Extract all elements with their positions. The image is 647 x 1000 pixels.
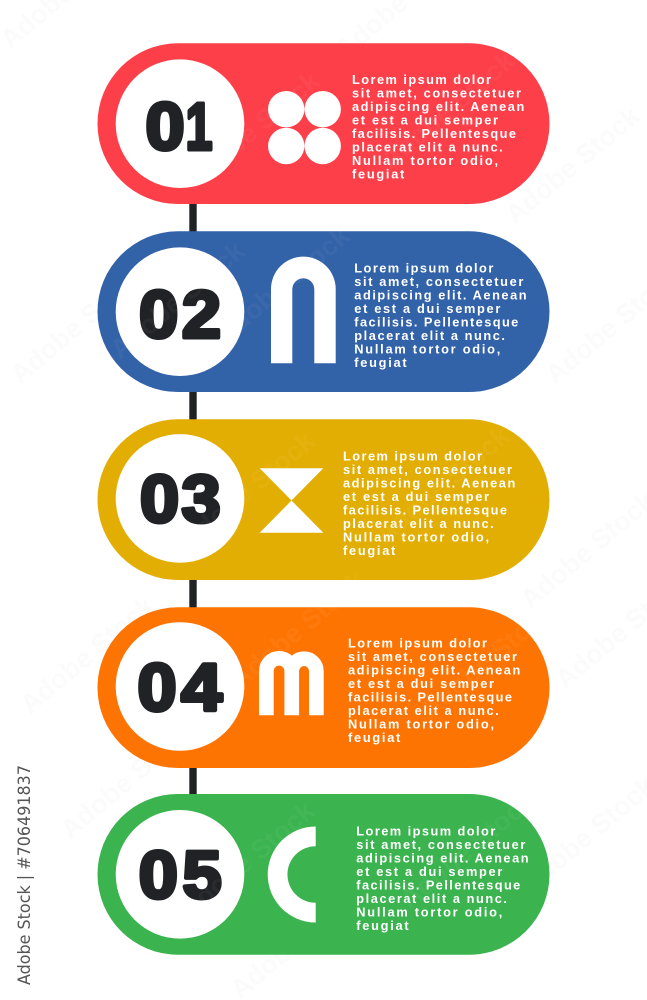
- number badge 02: [116, 247, 244, 376]
- text block 01: et est a dui semper: [352, 112, 498, 128]
- text block 05: [356, 823, 529, 933]
- number badge 05: 0: [139, 838, 178, 913]
- text block 04: sit amet, consectetuer: [348, 649, 517, 664]
- number badge 04: [116, 622, 244, 751]
- watermark over panels: Adobe Stock: [370, 420, 516, 550]
- panel: step 04: [98, 607, 550, 768]
- text block 05: sit amet, consectetuer: [356, 837, 525, 852]
- text block 03: Lorem ipsum dolor: [343, 449, 482, 464]
- icon: four circles: [268, 91, 341, 164]
- icon: half ring: [268, 826, 316, 922]
- text block 03: et est a dui semper: [343, 489, 489, 504]
- text block 05: adipiscing elit. Aenean: [356, 850, 529, 865]
- stock credit label: Adobe Stock | #706491837: [15, 765, 35, 985]
- text block 03: Nullam tortor odio,: [343, 530, 489, 545]
- text block 01: Lorem ipsum dolor: [352, 72, 491, 87]
- text block 01: facilisis. Pellentesque: [352, 126, 516, 141]
- text block 05: Lorem ipsum dolor: [356, 823, 495, 838]
- text block 05: feugiat: [356, 918, 409, 933]
- text block 01: Nullam tortor odio,: [352, 153, 498, 168]
- number badge 05: [116, 810, 244, 939]
- number badge 01: 1: [186, 90, 212, 165]
- connector line: [189, 200, 197, 800]
- text block 04: feugiat: [348, 730, 401, 745]
- watermark over panels: Adobe Stock: [210, 220, 356, 350]
- text block 04: et est a dui semper: [348, 676, 494, 691]
- text block 02: sit amet, consectetuer: [354, 274, 523, 289]
- text block 02: Nullam tortor odio,: [354, 342, 500, 357]
- panel: step 03: [98, 419, 550, 580]
- text block 01: placerat elit a nunc.: [352, 140, 503, 154]
- text block 02: [354, 261, 527, 370]
- text block 03: sit amet, consectetuer: [343, 462, 512, 477]
- text block 03: feugiat: [343, 543, 396, 558]
- watermark over panels: Adobe Stock: [175, 425, 321, 555]
- text block 01: feugiat: [352, 166, 405, 182]
- number badge 01: [116, 59, 244, 188]
- panel: step 05: [98, 794, 550, 955]
- text block 04: Lorem ipsum dolor: [348, 635, 487, 650]
- watermark over panels: Adobe Stock: [175, 795, 321, 925]
- text block 05: et est a dui semper: [356, 864, 502, 879]
- icon: arch: [271, 257, 336, 363]
- text block 04: placerat elit a nunc.: [348, 703, 499, 718]
- text block 05: facilisis. Pellentesque: [356, 877, 520, 892]
- text block 01: [352, 72, 524, 182]
- watermark over panels: Adobe Stock: [105, 235, 251, 365]
- text block 04: Nullam tortor odio,: [348, 716, 494, 731]
- text block 02: Lorem ipsum dolor: [354, 261, 493, 276]
- watermark over panels: Adobe Stock: [375, 45, 521, 175]
- number badge 02: 2: [182, 277, 221, 352]
- panel: step 02: [98, 231, 550, 392]
- text block 02: facilisis. Pellentesque: [354, 315, 518, 330]
- watermark over panels: Adobe Stock: [415, 595, 561, 725]
- text block 04: [348, 635, 520, 745]
- text block 05: placerat elit a nunc.: [356, 891, 507, 906]
- text block 02: adipiscing elit. Aenean: [354, 288, 527, 303]
- text block 01: adipiscing elit. Aenean: [352, 99, 524, 114]
- number badge 03: [116, 434, 244, 563]
- text block 02: et est a dui semper: [354, 301, 500, 316]
- text block 02: placerat elit a nunc.: [354, 328, 505, 343]
- number badge 01: 0: [145, 89, 185, 164]
- text block 01: sit amet, consectetuer: [352, 86, 521, 100]
- icon: hourglass: [260, 468, 323, 533]
- text block 03: adipiscing elit. Aenean: [343, 476, 515, 491]
- text block 04: adipiscing elit. Aenean: [348, 662, 520, 677]
- number badge 03: 0: [140, 462, 179, 537]
- text block 04: facilisis. Pellentesque: [348, 689, 512, 704]
- watermark over panels: Adobe Stock: [180, 65, 326, 195]
- number badge 02: 0: [139, 277, 178, 352]
- text block 03: facilisis. Pellentesque: [343, 503, 507, 518]
- number badge 04: 4: [181, 649, 222, 725]
- icon: double arch: [266, 658, 316, 715]
- number badge 03: 3: [181, 462, 221, 537]
- number badge 05: 5: [182, 838, 222, 913]
- panel: step 01: [98, 43, 550, 204]
- text block 03: placerat elit a nunc.: [343, 516, 494, 531]
- text block 05: Nullam tortor odio,: [356, 904, 502, 919]
- text block 02: feugiat: [354, 355, 407, 370]
- text block 03: [343, 449, 515, 558]
- number badge 04: 0: [137, 650, 177, 725]
- watermark over panels: Adobe Stock: [395, 785, 541, 915]
- watermark over panels: [105, 45, 561, 925]
- watermark over panels: Adobe Stock: [225, 565, 371, 695]
